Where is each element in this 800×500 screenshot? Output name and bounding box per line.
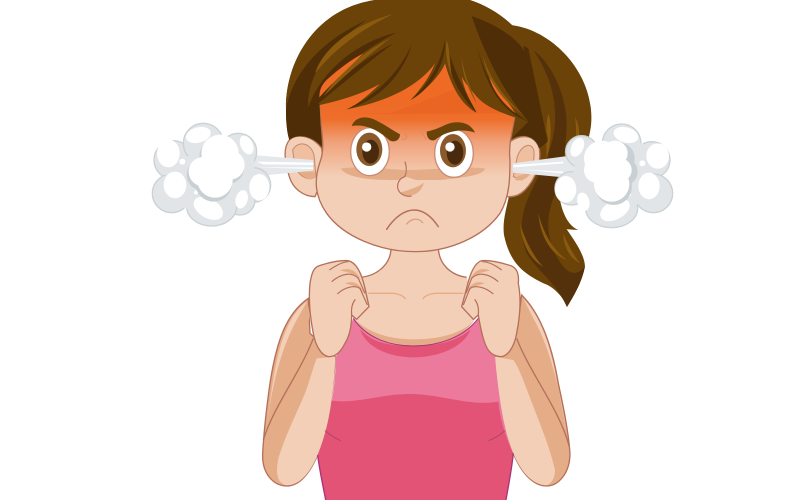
hair: bang shadow	[308, 32, 397, 107]
cloud highlights	[555, 124, 669, 226]
ear: left	[285, 136, 325, 197]
eyebrow: right	[427, 122, 475, 140]
cloud	[555, 124, 673, 228]
ponytail	[504, 25, 591, 307]
ear: right	[507, 137, 540, 197]
neck and chest	[352, 247, 478, 346]
steam jet	[513, 155, 575, 178]
head	[285, 0, 548, 252]
cloud	[152, 123, 271, 226]
hair: highlights	[315, 14, 523, 115]
steam jet	[252, 155, 313, 177]
cloud highlights	[157, 124, 269, 225]
tank top	[318, 318, 513, 500]
forehead peeking through bangs	[319, 53, 363, 97]
eye: left	[351, 128, 389, 176]
steam: left	[152, 123, 313, 226]
eye: right	[435, 129, 473, 177]
fist: right	[462, 261, 520, 357]
cloud centre	[585, 142, 638, 205]
hair: right shadow	[472, 16, 548, 148]
hair: back	[286, 0, 548, 150]
hair: left shadow	[286, 20, 367, 147]
frown wrinkles	[402, 126, 427, 140]
arm: left	[263, 298, 335, 486]
eyebrow: left	[352, 117, 400, 141]
forehead shading	[338, 90, 515, 115]
steam: right	[513, 124, 673, 228]
under-eye shadow	[341, 167, 485, 180]
nose	[398, 162, 424, 196]
fist: left	[309, 261, 369, 357]
cloud centre	[187, 137, 244, 202]
mouth	[387, 210, 438, 229]
face	[316, 40, 516, 252]
arm: right	[495, 295, 570, 486]
hair: front and bangs	[286, 0, 548, 148]
